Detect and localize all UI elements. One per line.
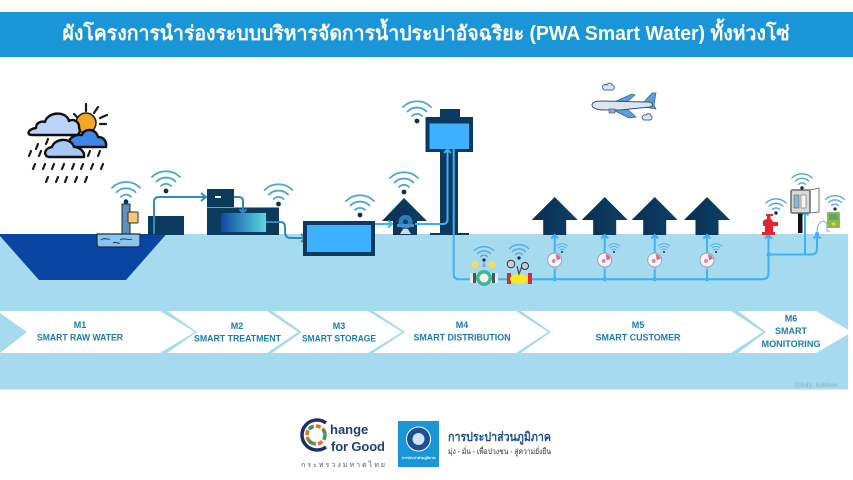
label: M1 <box>37 320 123 342</box>
label: M5: SMART CUSTOMER <box>596 332 681 342</box>
logo: Change for Good: hange <box>330 422 368 437</box>
icon: weather <box>29 104 107 182</box>
label: M6: MONITORING <box>762 339 820 349</box>
label: M2 <box>194 321 281 344</box>
pipes: raw water to storage <box>154 193 306 242</box>
title banner: ผังโครงการนำร่องระบบบริหารจัดการน้ำประปาอัจฉริยะ (PWA Smart Water) ทั้งห่วงโซ่ <box>62 18 790 45</box>
storage tank <box>303 221 375 256</box>
reservoir <box>0 234 166 280</box>
label: M1: M1 <box>74 320 86 330</box>
label: M4 <box>414 320 510 342</box>
title banner <box>0 12 853 57</box>
logo: PWA seal <box>398 421 439 467</box>
logo: PWA wordmark <box>448 430 551 457</box>
intake building <box>148 216 184 235</box>
customer service pipes <box>551 235 710 281</box>
logo: PWA wordmark: มุ่ง - มั่น - เพื่อปวงชน - สู่ความยั่งยืน <box>448 445 551 457</box>
label: M6: SMART <box>775 326 807 336</box>
watermark: @Edy_Edition <box>794 382 838 389</box>
wifi signals <box>112 101 845 262</box>
label: M4: SMART DISTRIBUTION <box>414 332 510 342</box>
label: M3: M3 <box>333 321 345 331</box>
icon: pressure valve <box>507 260 532 284</box>
process chevrons <box>0 311 852 353</box>
logo: PWA wordmark: การประปาส่วนภูมิภาค <box>448 430 551 445</box>
pump house <box>382 198 427 235</box>
label: M6: M6 <box>785 314 797 324</box>
treatment plant <box>207 189 279 235</box>
ground panel <box>0 234 848 390</box>
logo: PWA seal: การประปาส่วนภูมิภาค <box>402 455 436 461</box>
label: M2: SMART TREATMENT <box>194 334 281 344</box>
label: M5 <box>596 320 681 342</box>
logo: Change for Good: for Good <box>331 439 385 454</box>
icon: airplane <box>592 83 656 120</box>
icon: fire hydrant <box>762 214 778 235</box>
icon: flow meter <box>470 261 498 286</box>
houses <box>532 197 730 235</box>
water tower <box>426 109 473 235</box>
label: M3: SMART STORAGE <box>302 334 376 344</box>
icon: monitoring cabinet <box>791 188 819 233</box>
logo: Change for Good <box>301 420 385 469</box>
distribution pipes <box>375 149 820 279</box>
label: M4: M4 <box>456 320 468 330</box>
label: M5: M5 <box>632 320 644 330</box>
logo: Change for Good: กระทรวงมหาดไทย <box>301 460 385 469</box>
label: M1: SMART RAW WATER <box>37 332 123 342</box>
smart meters <box>548 253 714 270</box>
label: M6 <box>762 314 820 349</box>
label: M3 <box>302 321 376 344</box>
icon: river level gauge <box>97 204 140 247</box>
label: M2: M2 <box>231 321 243 331</box>
icon: handheld sensor <box>817 212 840 232</box>
